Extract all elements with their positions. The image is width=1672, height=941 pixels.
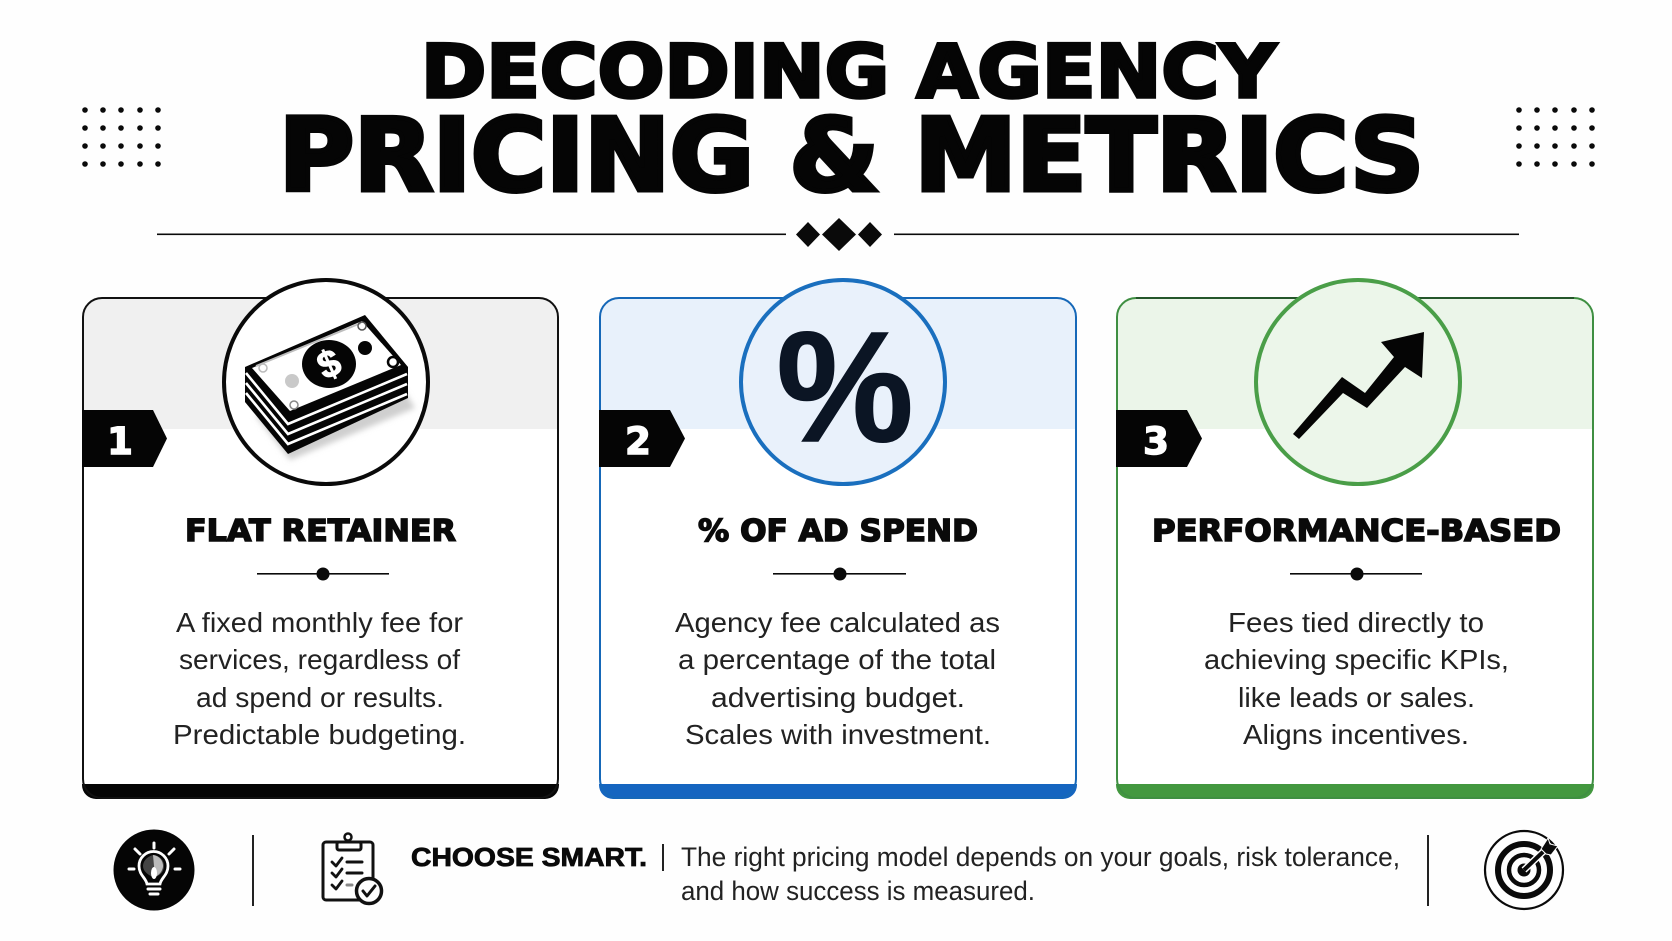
title divider with diamonds xyxy=(157,218,1519,251)
heading: PERFORMANCE-BASED xyxy=(1152,514,1561,549)
heading ornament xyxy=(773,568,906,580)
callout: The right pricing model depends on your goals, risk tolerance, xyxy=(681,842,1400,872)
heading ornament xyxy=(1290,568,1422,580)
title: PRICING & METRICS xyxy=(279,97,1424,214)
dot pattern right xyxy=(1516,107,1595,167)
icon: clipboard checklist xyxy=(323,834,382,904)
callout xyxy=(411,842,1400,906)
number badge 1 xyxy=(82,410,167,467)
callout: and how success is measured. xyxy=(681,876,1035,906)
description: a percentage of the total xyxy=(678,644,996,675)
description: like leads or sales. xyxy=(1238,682,1475,713)
icon: rising arrow xyxy=(1256,280,1460,484)
panel: performance based xyxy=(1116,280,1594,799)
description: Fees tied directly to xyxy=(1228,607,1484,638)
description xyxy=(173,607,466,750)
panel: percent of ad spend xyxy=(599,280,1077,799)
description: Aligns incentives. xyxy=(1243,719,1469,750)
number badge 1: 1 xyxy=(107,420,133,463)
description: achieving specific KPIs, xyxy=(1204,644,1509,675)
heading: % OF AD SPEND xyxy=(698,514,978,549)
separator right xyxy=(1427,835,1429,906)
description: advertising budget. xyxy=(711,682,965,713)
dot pattern left xyxy=(82,107,161,167)
icon: percent: % xyxy=(776,300,914,475)
description: Scales with investment. xyxy=(685,719,991,750)
description: Predictable budgeting. xyxy=(173,719,466,750)
callout: CHOOSE SMART. xyxy=(411,842,647,872)
number badge 2 xyxy=(599,410,685,467)
icon: percent xyxy=(741,280,945,484)
description: Agency fee calculated as xyxy=(675,607,1000,638)
icon: money stack: $ xyxy=(311,341,348,388)
description: A fixed monthly fee for xyxy=(176,607,463,638)
separator left xyxy=(252,835,254,906)
icon: money stack xyxy=(224,280,428,484)
description: services, regardless of xyxy=(179,644,460,675)
icon: target with arrow xyxy=(1485,831,1563,909)
heading ornament xyxy=(257,568,389,580)
heading: FLAT RETAINER xyxy=(185,514,456,549)
icon: light bulb xyxy=(114,830,194,910)
panel: flat retainer xyxy=(82,280,559,799)
description: ad spend or results. xyxy=(196,682,444,713)
number badge 2: 2 xyxy=(625,420,651,463)
title: DECODING AGENCY xyxy=(421,30,1277,115)
description xyxy=(1204,607,1509,750)
number badge 3: 3 xyxy=(1143,420,1169,463)
title xyxy=(279,30,1424,214)
description xyxy=(675,607,1000,750)
number badge 3 xyxy=(1116,410,1202,467)
